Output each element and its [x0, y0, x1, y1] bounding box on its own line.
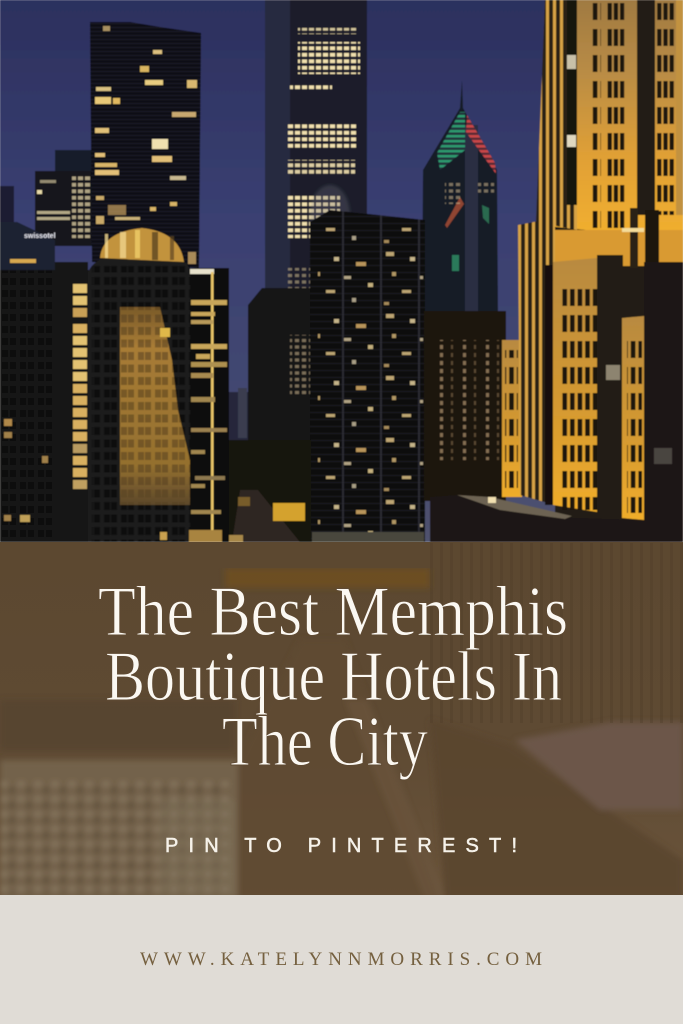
sky	[0, 0, 683, 542]
building: cylindrical tower with gold reflection	[88, 228, 190, 542]
lower base building	[430, 495, 683, 542]
lower left blocks and trees	[0, 760, 238, 900]
steam plume	[310, 185, 350, 245]
building: dark block under spire	[424, 311, 506, 501]
building: swissotel block far left	[0, 222, 56, 272]
shadowed backing of lower section	[555, 215, 683, 525]
photo: city skyline at dusk	[0, 0, 683, 542]
call to action: PIN TO PINTEREST!	[165, 835, 517, 857]
building: dark block far left	[0, 262, 90, 542]
distant skyline in the gap	[229, 388, 249, 452]
title: The City	[222, 703, 428, 781]
street glow	[229, 440, 311, 542]
faded photo content	[0, 568, 683, 900]
building: swissotel block far left: swissotel	[24, 233, 56, 240]
setback lower section	[555, 230, 683, 266]
building: central window tower	[310, 210, 425, 542]
building: spire tower with coloured lights	[422, 80, 498, 312]
website url: WWW.KATELYNNMORRIS.COM	[140, 949, 542, 970]
title: The Best Memphis	[98, 573, 568, 651]
footer band	[0, 895, 683, 1024]
title: Boutique Hotels In	[105, 638, 562, 716]
street light glow	[225, 568, 430, 588]
building: central grey skyscraper	[265, 0, 367, 310]
road	[242, 864, 426, 895]
building: mid-ground dark block	[248, 288, 320, 512]
right buildings	[440, 786, 682, 895]
building: tower behind left	[35, 150, 92, 246]
building: black tower with gold vertical line	[189, 268, 229, 542]
building: gold lit tower right	[430, 0, 683, 542]
upper shaft	[537, 0, 683, 240]
building: small tower far left	[0, 186, 14, 226]
building: tall dark tower left	[90, 22, 201, 268]
brown overlay panel	[0, 542, 683, 900]
title	[98, 573, 568, 781]
